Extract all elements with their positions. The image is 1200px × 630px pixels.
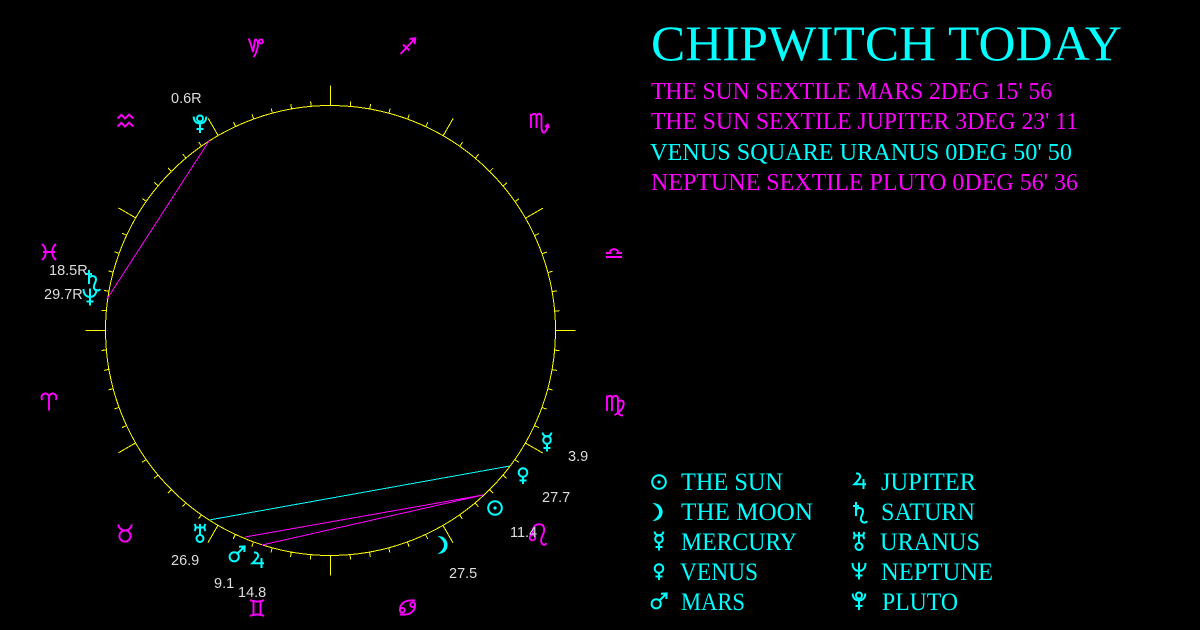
planet degree labels: 26.9 [171,553,199,569]
icon: taurus [118,524,132,542]
chart wheel [42,38,624,616]
icon: leo [530,524,546,545]
icon: aries [42,394,56,410]
icon: neptune [852,562,866,580]
icon: mars [652,593,667,608]
legend names: THE MOON [681,499,813,526]
title: CHIPWITCH TODAY [651,15,1122,71]
icon: libra [606,249,622,257]
icon: jupiter [252,552,264,568]
icon: neptune [84,288,96,306]
icon: moon [438,536,448,554]
icon: mercury [542,432,552,452]
planet glyphs [84,116,552,568]
planet degree labels: 0.6R [171,91,202,107]
legend names: PLUTO [882,589,958,616]
legend names [680,469,993,616]
legend glyphs [652,473,867,610]
icon: jupiter [854,473,866,489]
planet degree labels: 3.9 [568,449,588,465]
aspect list: THE SUN SEXTILE JUPITER 3DEG 23' 11 [651,109,1078,135]
icon: saturn [86,270,100,291]
icon: pisces [42,244,56,260]
icon: uranus [854,532,864,550]
icon: mercury [654,532,664,550]
aspect list: VENUS SQUARE URANUS 0DEG 50' 50 [650,140,1072,166]
icon: scorpio [531,114,549,133]
icon: moon [652,503,663,521]
icon: virgo [607,396,624,416]
zodiac signs [42,38,624,616]
icon: mars [230,546,245,561]
icon: capricorn [248,38,263,57]
planet legend [652,469,993,616]
icon: aquarius [118,115,134,126]
icon: pluto [194,116,206,133]
planet degree labels: 11.4 [510,525,537,541]
planet degree labels: 27.7 [542,490,570,506]
five-degree ticks [103,103,558,558]
icon: saturn [853,502,867,523]
icon: sun [488,501,502,515]
aspect list: NEPTUNE SEXTILE PLUTO 0DEG 56' 36 [651,170,1078,196]
aspect lines [107,141,510,545]
legend names: VENUS [680,559,758,586]
icon: uranus [194,524,206,542]
icon: pluto [853,592,865,610]
planet degree labels: 18.5R [49,263,88,279]
planet degree labels: 9.1 [214,576,234,592]
legend names: URANUS [880,529,980,556]
planet degree labels [44,91,588,601]
legend names: MERCURY [681,529,797,556]
planet degree labels: 27.5 [449,566,477,582]
planet degree labels: 29.7R [44,287,83,303]
planet degree labels: 14.8 [238,585,266,601]
legend names: NEPTUNE [881,559,993,586]
legend names: THE SUN [681,469,783,496]
icon: sagittarius [400,38,415,54]
icon: venus [655,564,663,580]
legend names: MARS [681,589,745,616]
zodiac ring [106,106,556,556]
aspect list: THE SUN SEXTILE MARS 2DEG 15' 56 [651,79,1052,105]
aspect list [650,79,1078,196]
thirty-degree ticks [96,96,566,566]
legend names: JUPITER [881,469,976,496]
icon: cancer [400,600,415,615]
icon: venus [519,468,527,484]
legend names: SATURN [881,499,975,526]
icon: sun [652,475,666,489]
icon: gemini [250,600,264,616]
